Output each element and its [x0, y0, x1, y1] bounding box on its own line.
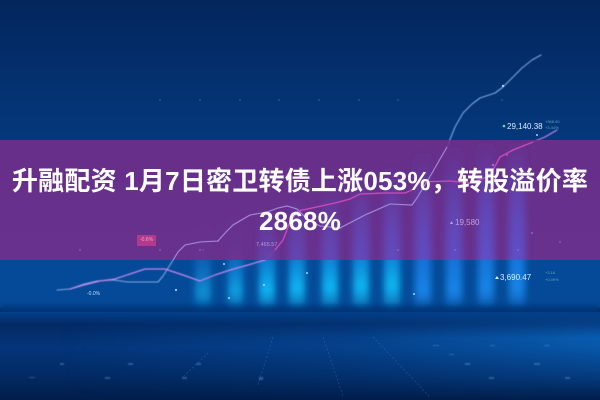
- red percentage tag: -0.6%: [140, 237, 153, 243]
- title: [12, 166, 588, 236]
- scattered floor marks: [29, 345, 570, 380]
- label: 29,140.38: 29,140.38: [507, 122, 543, 131]
- band dots: [79, 154, 561, 251]
- label: 3,690.47: +0.09%: [545, 277, 559, 282]
- band pink line: [275, 142, 533, 250]
- label: -0.0%: -0.0%: [87, 291, 101, 297]
- label: 19,580: [450, 219, 480, 226]
- band overlay chart: [79, 141, 561, 260]
- band blue line: [172, 146, 448, 260]
- label: 7,465.57: 7,465.57: [256, 242, 277, 248]
- title: 升融配资 1月7日密卫转债上涨053%，转股溢价率: [12, 166, 588, 196]
- pink index line: [70, 130, 557, 289]
- red percentage tag: [137, 235, 156, 246]
- lower floor: [0, 304, 600, 400]
- upper sky: [0, 0, 600, 308]
- label: 29,140.38: [503, 119, 560, 131]
- purple title band: [0, 140, 600, 260]
- chart lines: [57, 55, 557, 290]
- label: 3,690.47: [495, 270, 559, 282]
- light blue index line: [57, 55, 541, 290]
- label: 3,690.47: +3.16: [545, 270, 556, 275]
- label: 19,580: 19,580: [455, 218, 480, 227]
- title: 2868%: [259, 206, 341, 236]
- floor glow on right: [166, 316, 600, 394]
- floor perspective lines: [183, 337, 430, 397]
- dashed horizon line: [90, 312, 530, 314]
- glowing light columns: [195, 140, 525, 305]
- band light columns: [258, 155, 528, 260]
- faint grid dots: [159, 99, 503, 101]
- label: 29,140.38: +3.44%: [545, 125, 559, 130]
- label: 29,140.38: +968.90: [545, 119, 560, 124]
- scattered dots: [175, 85, 538, 299]
- label: 3,690.47: 3,690.47: [500, 273, 532, 282]
